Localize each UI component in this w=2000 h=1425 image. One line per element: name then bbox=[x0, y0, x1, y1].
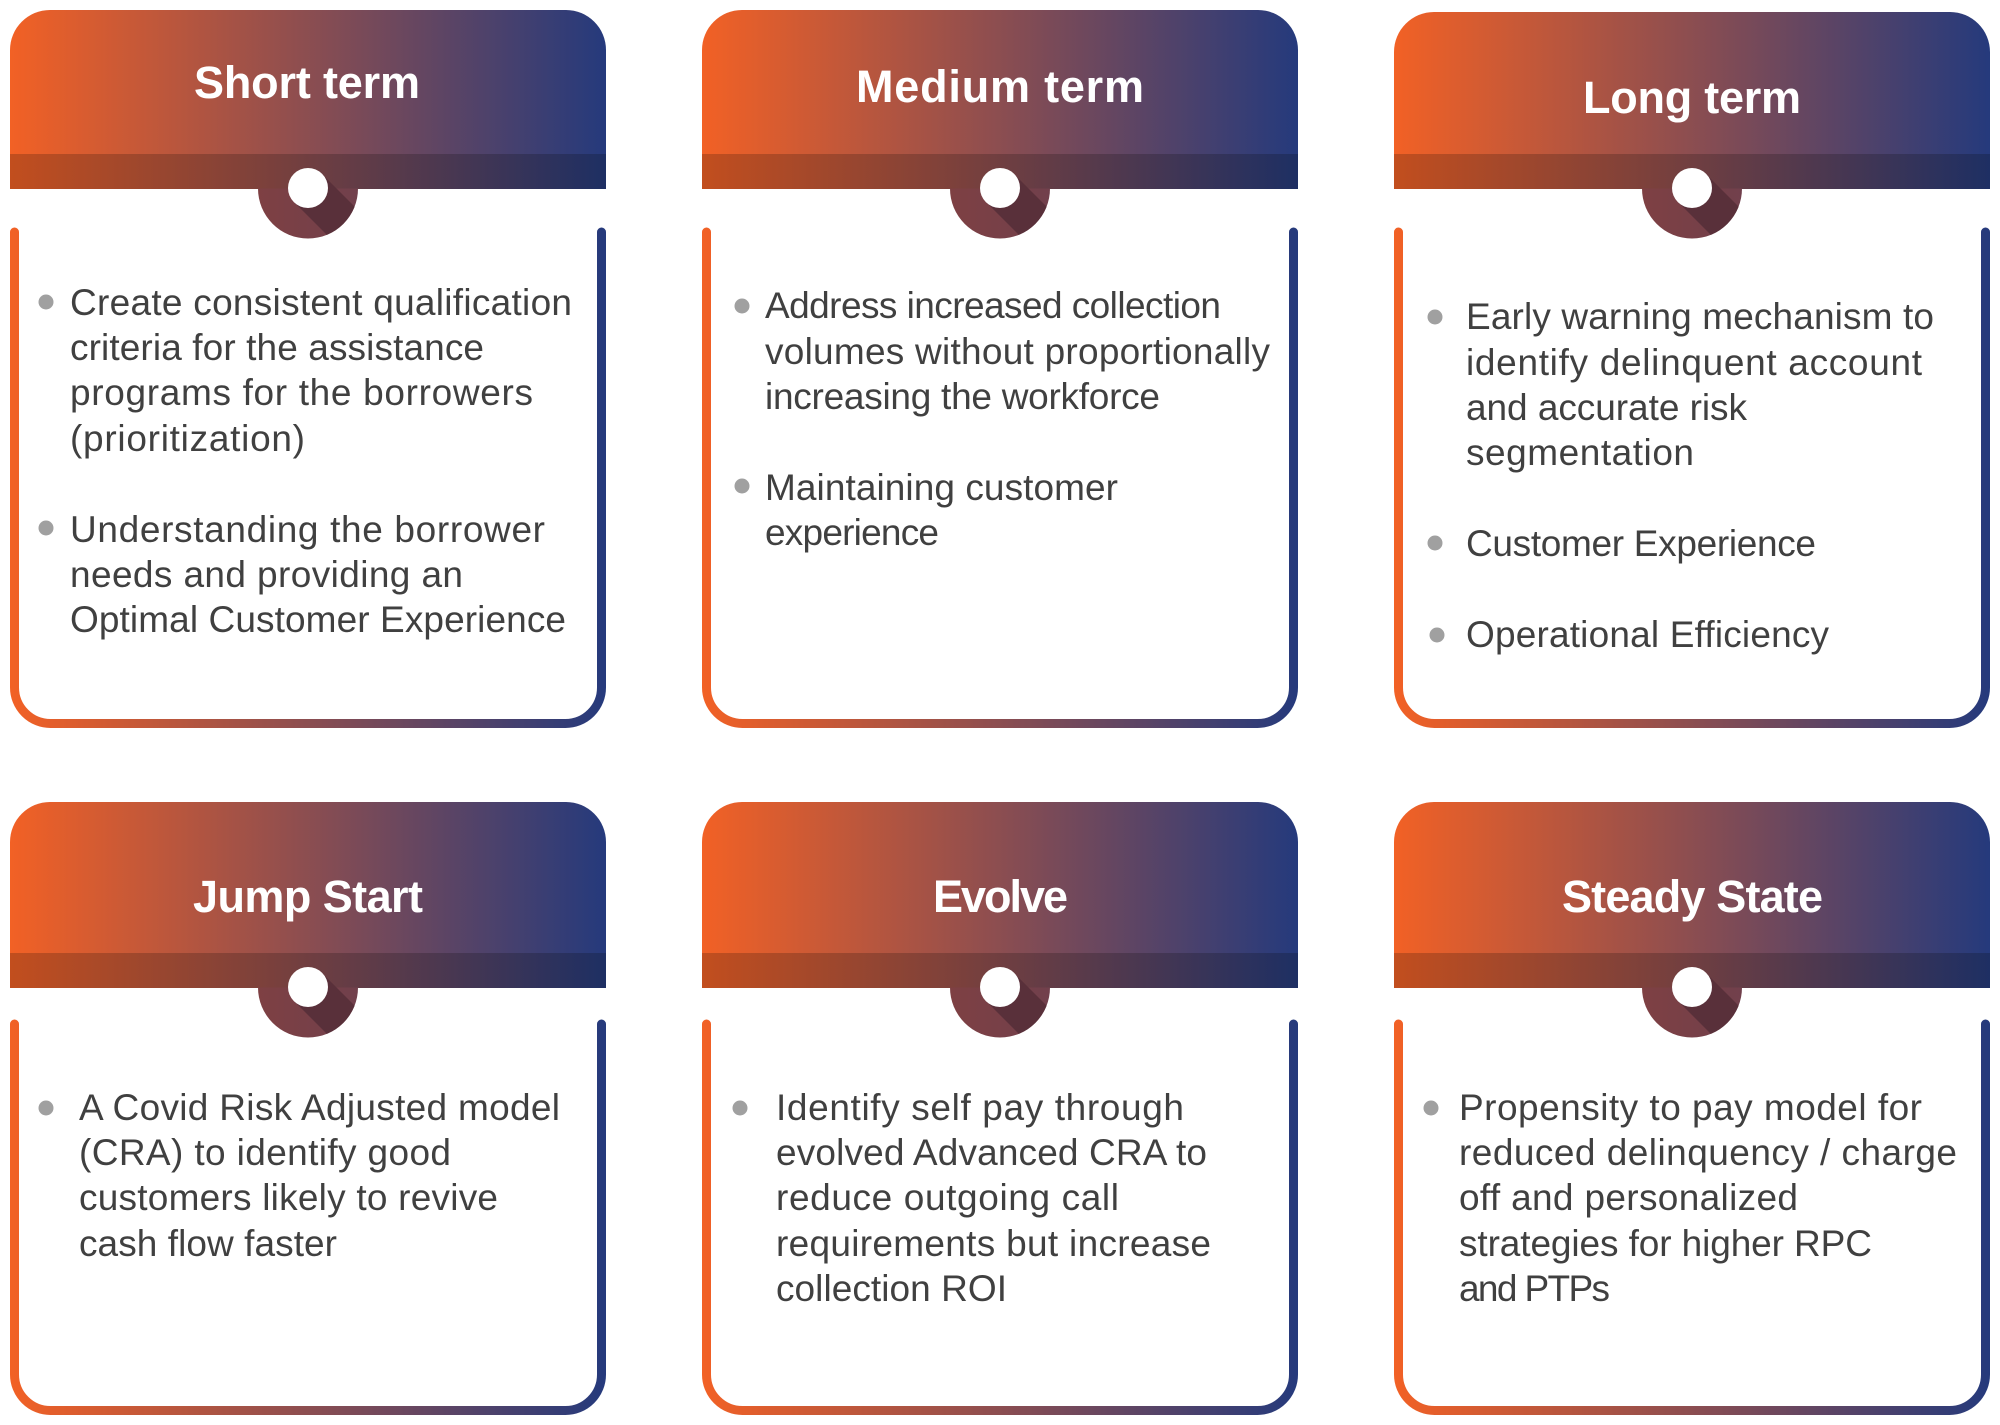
bullet list bbox=[734, 285, 1270, 553]
panel: Long term bbox=[1394, 12, 1990, 724]
bullet list: and accurate risk bbox=[1466, 387, 1748, 428]
bullet list: (CRA) to identify good bbox=[79, 1132, 451, 1173]
card frame bbox=[706, 232, 1294, 724]
bullet list: Understanding the borrower bbox=[70, 509, 545, 550]
panel: Short term bbox=[10, 10, 606, 724]
bullet list: customers likely to revive bbox=[79, 1177, 498, 1218]
header: Steady State: Steady State bbox=[1562, 871, 1823, 922]
bullet list: cash flow faster bbox=[79, 1223, 337, 1264]
bullet list bbox=[38, 282, 572, 640]
panel: Evolve bbox=[702, 802, 1298, 1410]
header: Long term bbox=[1394, 12, 1990, 238]
card frame bbox=[706, 1024, 1294, 1410]
bullet list: reduce outgoing call bbox=[776, 1177, 1119, 1218]
bullet list: Create consistent qualification bbox=[70, 282, 572, 323]
bullet list: criteria for the assistance bbox=[70, 327, 484, 368]
header: Medium term bbox=[702, 10, 1298, 238]
bullet list: segmentation bbox=[1466, 432, 1694, 473]
bullet list: collection ROI bbox=[776, 1268, 1007, 1309]
header: Evolve: Evolve bbox=[933, 871, 1068, 922]
card frame bbox=[14, 1024, 602, 1410]
header: Short term bbox=[10, 10, 606, 238]
header: Evolve bbox=[702, 802, 1298, 1038]
bullet list: needs and providing an bbox=[70, 554, 463, 595]
panel: Jump Start bbox=[10, 802, 606, 1410]
bullet list: Operational Efficiency bbox=[1466, 614, 1830, 655]
header: Short term: Short term bbox=[194, 57, 420, 108]
header: Medium term: Medium term bbox=[856, 61, 1144, 112]
bullet list: (prioritization) bbox=[70, 418, 305, 459]
bullet list: Optimal Customer Experience bbox=[70, 599, 566, 640]
panel: Steady State bbox=[1394, 802, 1990, 1410]
bullet list bbox=[38, 1087, 560, 1264]
bullet list bbox=[732, 1087, 1211, 1309]
bullet list: evolved Advanced CRA to bbox=[776, 1132, 1207, 1173]
header: Long term: Long term bbox=[1583, 72, 1801, 123]
bullet list: Early warning mechanism to bbox=[1466, 296, 1934, 337]
bullet list: and PTPs bbox=[1459, 1268, 1610, 1309]
card frame bbox=[1398, 232, 1986, 724]
bullet list: off and personalized bbox=[1459, 1177, 1798, 1218]
bullet list: Address increased collection bbox=[765, 285, 1221, 326]
card frame bbox=[14, 232, 602, 724]
bullet list bbox=[1424, 1087, 1957, 1309]
bullet list: programs for the borrowers bbox=[70, 372, 533, 413]
bullet list: identify delinquent account bbox=[1466, 342, 1923, 383]
bullet list: Customer Experience bbox=[1466, 523, 1816, 564]
bullet list: strategies for higher RPC bbox=[1459, 1223, 1872, 1264]
bullet list: Maintaining customer bbox=[765, 467, 1118, 508]
panel: Medium term bbox=[702, 10, 1298, 724]
bullet list: A Covid Risk Adjusted model bbox=[79, 1087, 560, 1128]
bullet list: reduced delinquency / charge bbox=[1459, 1132, 1957, 1173]
header: Jump Start: Jump Start bbox=[193, 871, 423, 922]
bullet list: Identify self pay through bbox=[776, 1087, 1184, 1128]
bullet list: increasing the workforce bbox=[765, 376, 1160, 417]
card frame bbox=[1398, 1024, 1986, 1410]
header: Steady State bbox=[1394, 802, 1990, 1038]
bullet list: Propensity to pay model for bbox=[1459, 1087, 1922, 1128]
bullet list: requirements but increase bbox=[776, 1223, 1211, 1264]
header: Jump Start bbox=[10, 802, 606, 1038]
bullet list: volumes without proportionally bbox=[765, 331, 1270, 372]
bullet list bbox=[1428, 296, 1934, 655]
bullet list: experience bbox=[765, 512, 939, 553]
